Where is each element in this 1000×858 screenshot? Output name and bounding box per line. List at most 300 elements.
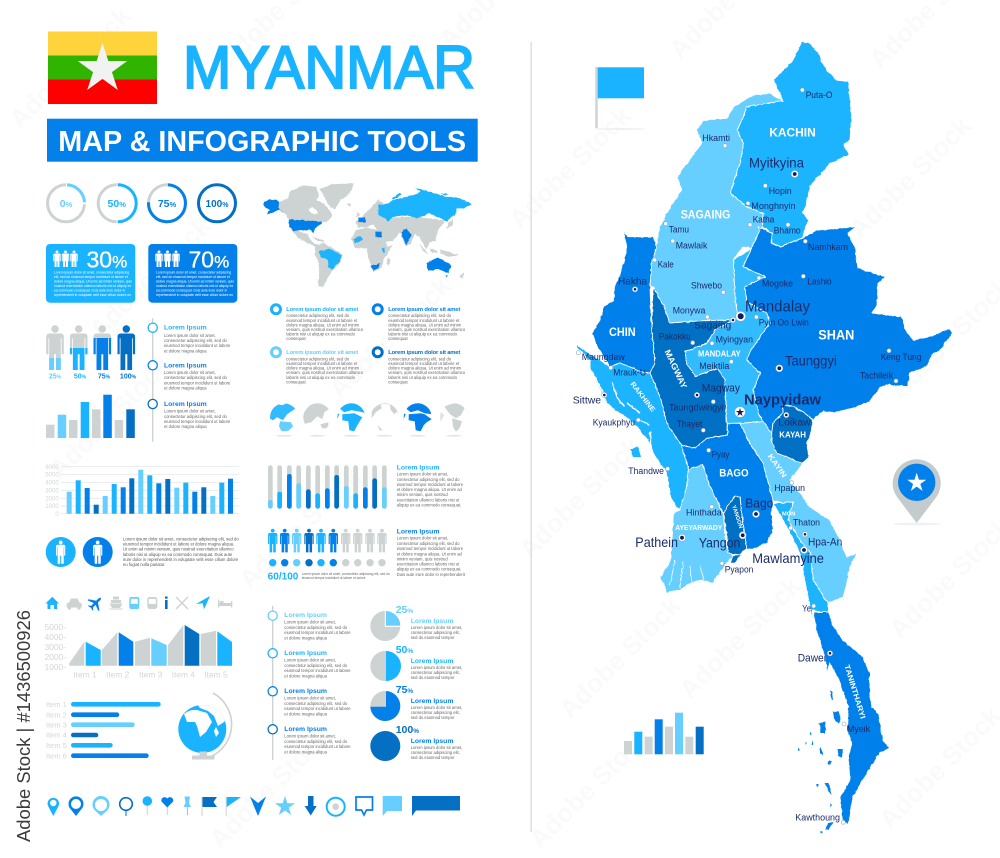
heart pin <box>161 797 173 815</box>
pie 75%: Lorem ipsum dolor sit amet, <box>411 705 462 710</box>
pie 75%: Lorem Ipsum <box>411 698 453 705</box>
legend with four items: consectetur adipiscing elit, sed do <box>286 356 350 361</box>
region: Yangon <box>723 497 747 555</box>
city names: Thaton <box>793 517 820 527</box>
text beside pictogram <box>397 528 466 577</box>
timeline with four entries: eiusmod tempor incididunt ut labore <box>284 668 351 673</box>
timeline with four entries: et dolore magna aliqua <box>284 635 328 640</box>
globe 1 <box>270 404 296 432</box>
icon: blue flag <box>594 67 646 130</box>
pin 3 <box>92 796 109 816</box>
ring 100%: 100% <box>206 199 229 210</box>
city names: Mawlamyine <box>752 550 824 566</box>
people percentage figures: 100% <box>120 374 137 380</box>
region: Mon <box>773 502 828 620</box>
timeline with three entries: Lorem Ipsum <box>164 401 207 408</box>
person icons in circles <box>46 537 113 567</box>
column chart with axis: 5000 <box>45 472 59 478</box>
striped level bars <box>268 465 387 509</box>
region: Magway <box>650 287 733 448</box>
city names: Myitkyina <box>749 155 804 171</box>
globe 5 <box>403 402 433 431</box>
legend with four items: veniam, quis nostrud exercitation ullamco <box>286 370 364 375</box>
small bar chart <box>46 395 135 438</box>
city names: Hkamti <box>702 133 730 143</box>
timeline with four entries: consectetur adipiscing elit, sed do <box>284 625 348 630</box>
legend with four items: consequat <box>286 379 306 384</box>
timeline with three entries: Lorem Ipsum <box>164 362 207 370</box>
stat card 70%: Lorem ipsum dolor sit amet, consectetur adipiscing <box>156 270 231 274</box>
push pin <box>184 796 191 815</box>
city names: Kawthoung <box>795 813 840 823</box>
city names: Namhkam <box>808 242 848 252</box>
stat card 70%: elit, sed do eiusmod tempor incididunt ut labore et <box>156 275 230 279</box>
region names: SAGAING <box>681 210 730 222</box>
column chart with axis: 3000 <box>45 488 59 494</box>
city names: Dawei <box>798 653 826 665</box>
Rakhine inlets <box>590 368 652 450</box>
city names: Pyapon <box>725 565 753 575</box>
paragraph: eu fugiat nulla pariatur. <box>123 562 165 567</box>
timeline with four entries: Lorem Ipsum <box>284 688 327 695</box>
area column chart: Item 1 <box>73 670 97 680</box>
speech box filled <box>383 796 402 816</box>
city names: Thandwe <box>628 466 664 476</box>
column chart with axis: 2000 <box>45 496 59 502</box>
globe 3 <box>337 403 364 431</box>
pie 100%: Lorem ipsum dolor sit amet, <box>411 745 462 750</box>
icon: desk globe <box>178 693 232 760</box>
map pin and marker icons row <box>47 796 460 816</box>
city names: Bhamo <box>774 226 801 236</box>
city names: Hakha <box>618 275 647 287</box>
pie 25%: 25% <box>396 604 413 616</box>
timeline with three entries: Lorem ipsum dolor sit amet, <box>164 409 216 414</box>
city names: Hpapun <box>774 483 805 493</box>
pie 75%: consectetur adipiscing elit, <box>411 710 460 715</box>
legend with four items <box>272 305 466 384</box>
text beside level bars: aliquip ex ea commodo consequat. <box>397 502 461 507</box>
Mergui archipelago islands <box>798 690 843 834</box>
people percentage figures: 50% <box>74 374 87 380</box>
city names: Monghnyin <box>751 201 796 211</box>
column chart with axis: 4000 <box>45 480 59 486</box>
region names: MANDALAY <box>698 350 741 359</box>
legend with four items: laboris nisi ut aliquip ex ea commodo <box>286 375 356 380</box>
60 of 100 people pictogram: Lorem ipsum dolor sit amet, consectetur adipiscing elit, sed do <box>302 572 390 576</box>
region: Rakhine <box>577 344 688 510</box>
timeline with four entries: et dolore magna aliqua <box>284 673 328 678</box>
icon: house <box>46 597 59 609</box>
region names: KAYAH <box>779 430 806 439</box>
map cities and labels <box>573 88 921 824</box>
globe 6 <box>440 403 464 432</box>
timeline with four entries: Lorem ipsum dolor sit amet, <box>284 658 336 662</box>
legend with four items: consequat <box>388 379 408 384</box>
timeline with four entries: Lorem ipsum dolor sit amet, <box>284 620 336 624</box>
city names: Yangon <box>699 534 740 550</box>
region names: KACHIN <box>769 126 816 140</box>
city names: Shwebo <box>691 281 722 291</box>
progress rings <box>48 182 236 224</box>
legend with four items: dolore magna aliqua. Ut enim ad minim <box>286 366 360 371</box>
icon: plane <box>85 592 106 614</box>
icon: info <box>165 596 168 609</box>
text beside level bars: et dolore magna aliqua. Ut enim ad <box>397 487 463 492</box>
city names: Tachileik <box>860 371 893 381</box>
subtitle banner: MAP & INFOGRAPHIC TOOLS <box>58 126 466 158</box>
city names: Magway <box>702 383 740 395</box>
city names: Keng Tung <box>881 352 921 362</box>
legend with four items: dolore magna aliqua. Ut enim ad minim <box>388 366 462 371</box>
stat card 70%: reprehenderit in voluptate velit esse cillum dolore eu <box>156 293 233 297</box>
pie 50%: Lorem Ipsum <box>411 658 453 665</box>
city names: Loikaw <box>778 418 811 429</box>
city names: Pyin Oo Lwin <box>759 318 809 328</box>
paragraph: Lorem ipsum dolor sit amet, consectetur adipiscing elit, sed do <box>123 536 239 541</box>
legend with four items: laboris nisi ut aliquip ex ea commodo <box>286 332 356 337</box>
city names: Naypyidaw <box>744 391 821 408</box>
stat card 70%: nostrud exercitation ullamco laboris nisi ut aliquip ex <box>156 284 233 288</box>
pie 75%: 75% <box>396 684 413 696</box>
stat card 30%: ea commodo consequat. Duis aute irure dolor in <box>54 288 125 292</box>
delta channels <box>670 560 704 588</box>
region: Shan <box>743 227 953 433</box>
city names: Taunggyi <box>785 353 837 369</box>
60 of 100 people pictogram: 60/100 <box>268 571 299 582</box>
legend with four items: eiusmod tempor incididunt ut labore et <box>286 361 358 366</box>
flag of Myanmar <box>48 32 157 104</box>
horizontal bars: Item 6 <box>46 751 67 760</box>
speech banner <box>412 796 460 816</box>
people percentage figures <box>46 325 137 380</box>
pie 75% <box>370 684 462 721</box>
timeline with three entries: Lorem Ipsum <box>164 324 207 332</box>
icon: train <box>147 597 157 609</box>
timeline with three entries: consectetur adipiscing elit, sed do <box>164 414 228 419</box>
timeline with four entries: Lorem ipsum dolor sit amet, <box>284 696 336 700</box>
stat card 30%: Lorem ipsum dolor sit amet, consectetur adipiscing <box>54 270 129 274</box>
region names: TANINTHARYI <box>843 664 867 720</box>
text beside level bars <box>397 464 464 507</box>
city names: Bago <box>745 495 773 510</box>
stat card 30%: reprehenderit in voluptate velit esse cillum dolore eu <box>54 293 131 297</box>
pie 100% <box>370 724 462 761</box>
region names: MAGWAY <box>663 348 690 390</box>
ring 50%: 50% <box>108 198 126 210</box>
text beside level bars: exercitation ullamco laboris nisi ut <box>397 497 460 502</box>
city names: Mandalay <box>745 298 810 315</box>
people percentage figures: 75% <box>98 374 111 380</box>
timeline with three entries: eiusmod tempor incididunt ut labore <box>164 343 231 348</box>
legend with four items: veniam, quis nostrud exercitation ullamco <box>388 370 466 375</box>
city names: Thayet <box>677 419 703 429</box>
region: Bago <box>682 423 773 549</box>
text beside pictogram: Duis aute irure dolor in reprehenderit <box>397 572 466 577</box>
text beside level bars: Lorem ipsum dolor sit amet, <box>397 472 448 477</box>
title: MYANMAR <box>183 34 475 101</box>
area column chart: 1000- <box>45 662 66 672</box>
region names: AYEYARWADY <box>675 525 723 532</box>
highlighted countries <box>264 187 472 277</box>
legend with four items: dolore magna aliqua. Ut enim ad minim <box>388 322 462 327</box>
stat card 30%: nostrud exercitation ullamco laboris nisi ut aliquip ex <box>54 284 131 288</box>
timeline with four entries: consectetur adipiscing elit, sed do <box>284 739 348 744</box>
legend with four items: consectetur adipiscing elit, sed do <box>388 356 452 361</box>
legend with four items: veniam, quis nostrud exercitation ullamco <box>286 327 364 332</box>
paragraph: Ut enim ad minim veniam, quis nostrud exercitation ullamco <box>123 547 234 552</box>
city names: Mawlaik <box>676 240 708 250</box>
legend with four items: Lorem ipsum dolor sit amet <box>388 307 460 313</box>
speech box outline <box>356 797 372 815</box>
timeline with four entries: Lorem Ipsum <box>284 612 327 619</box>
world map <box>264 183 472 287</box>
legend with four items: consectetur adipiscing elit, sed do <box>388 313 452 318</box>
star <box>275 796 295 815</box>
paragraph: eiusmod tempor incididunt ut labore et dolore magna aliqua. <box>123 542 234 546</box>
pin 1 <box>47 798 59 816</box>
stat card 70%: 70% <box>188 246 229 272</box>
area column chart: Item 3 <box>139 670 163 680</box>
flag 1 <box>202 797 217 816</box>
text beside pictogram: minim veniam, quis nostrud <box>397 556 448 561</box>
text beside pictogram: consectetur adipiscing elit, sed do <box>397 541 460 546</box>
bar chart under map <box>624 713 704 754</box>
timeline with four entries: consectetur adipiscing elit, sed do <box>284 663 348 668</box>
legend with four items: laboris nisi ut aliquip ex ea commodo <box>388 332 458 337</box>
pie 100%: consectetur adipiscing elit, <box>411 750 460 755</box>
text beside level bars: consectetur adipiscing elit, sed do <box>397 477 460 482</box>
text beside level bars: minim veniam, quis nostrud <box>397 492 448 497</box>
column chart with axis <box>45 465 239 518</box>
pie charts with captions <box>370 604 462 761</box>
legend with four items: Lorem ipsum dolor sit amet <box>286 350 358 356</box>
pie 25%: consectetur adipiscing elit, <box>411 630 460 635</box>
icon: car <box>67 598 82 610</box>
timeline with three entries <box>148 318 231 442</box>
Rakhine coast island <box>630 447 641 457</box>
city names: Katha <box>753 214 774 224</box>
timeline with three entries: Lorem ipsum dolor sit amet, <box>164 333 216 338</box>
legend with four items: eiusmod tempor incididunt ut labore et <box>286 318 358 323</box>
pie 100%: 100% <box>396 724 419 736</box>
pie 100%: sed do eiusmod tempor <box>411 755 455 760</box>
pin 2 <box>68 796 84 816</box>
city names: Myingyan <box>716 334 753 344</box>
timeline with four entries: eiusmod tempor incididunt ut labore <box>284 630 351 635</box>
stock watermark id: Adobe Stock | #1436500926 <box>14 610 34 842</box>
horizontal bars: Item 3 <box>46 720 67 729</box>
timeline with four entries: Lorem Ipsum <box>284 650 327 657</box>
timeline with four entries: eiusmod tempor incididunt ut labore <box>284 744 351 749</box>
timeline with four entries: Lorem Ipsum <box>284 726 327 733</box>
paragraph: irure dolor in reprehenderit in voluptate velit esse cillum dolore <box>123 557 239 562</box>
area column chart: Item 5 <box>204 670 228 680</box>
timeline with three entries: Lorem ipsum dolor sit amet, <box>164 370 216 375</box>
stat card 30%: 30% <box>86 246 127 272</box>
timeline with three entries: eiusmod tempor incididunt ut labore <box>164 419 231 424</box>
target <box>327 798 345 816</box>
ring 100% <box>198 185 236 222</box>
stat card 70% <box>148 244 237 303</box>
legend with four items: Lorem ipsum dolor sit amet <box>388 350 460 356</box>
horizontal bars: Item 4 <box>46 731 67 740</box>
city names: Ye <box>802 604 811 614</box>
area column chart: 4000- <box>45 632 66 642</box>
region: Sagaing <box>650 93 783 323</box>
timeline with four entries: eiusmod tempor incididunt ut labore <box>284 706 351 711</box>
down arrow <box>305 796 317 816</box>
ring 50% <box>98 182 138 224</box>
timeline with four entries: et dolore magna aliqua <box>284 711 328 716</box>
city names: Mogoke <box>762 279 793 289</box>
city names: Hopin <box>769 186 792 196</box>
text beside pictogram: exercitation ullamco laboris nisi ut <box>397 562 460 566</box>
capital star <box>736 408 744 416</box>
timeline with three entries: consectetur adipiscing elit, sed do <box>164 338 228 343</box>
globe shadows <box>276 435 462 437</box>
transport and service icons <box>46 592 232 614</box>
text beside pictogram: Lorem Ipsum <box>397 528 439 535</box>
column chart with axis: 1000 <box>45 504 59 510</box>
icon: cutlery <box>176 597 188 609</box>
ring 75% <box>148 185 186 222</box>
text beside pictogram: eiusmod tempor incididunt ut labore <box>397 546 464 551</box>
icon: ship <box>110 596 122 610</box>
area column chart <box>45 622 232 680</box>
city dots <box>576 88 898 824</box>
timeline with three entries: eiusmod tempor incididunt ut labore <box>164 380 231 385</box>
city names <box>573 90 921 823</box>
city names: Lashio <box>807 277 832 287</box>
region: Kayah <box>772 405 813 463</box>
legend with four items: eiusmod tempor incididunt ut labore et <box>388 318 460 323</box>
paragraph: laboris nisi ut aliquip ex ea commodo consequat. Duis aute <box>123 552 233 557</box>
timeline with four entries: consectetur adipiscing elit, sed do <box>284 701 348 706</box>
icon: navigation arrow <box>196 596 210 609</box>
city names: Tamu <box>669 225 689 235</box>
people percentage figures: 25% <box>49 374 62 380</box>
city names: Monywa <box>673 305 705 315</box>
60 of 100 people pictogram <box>268 529 390 582</box>
region: Ayeyarwady <box>660 465 733 593</box>
city names: Sagaing <box>694 319 731 331</box>
timeline with four entries <box>268 606 351 760</box>
stat card 70%: ea commodo consequat. Duis aute irure dolor in <box>156 288 227 292</box>
column chart with axis: 6000 <box>45 465 59 471</box>
icon: location pin with star <box>893 459 941 525</box>
stat card 30% <box>46 244 135 303</box>
pie 25%: Lorem Ipsum <box>411 618 453 625</box>
text beside level bars: Lorem Ipsum <box>397 464 439 471</box>
stat card 70%: dolore magna aliqua. Ut enim ad minim veniam, quis <box>156 280 234 284</box>
text beside pictogram: et dolore magna aliqua. Ut enim ad <box>397 551 463 556</box>
ring 75%: 75% <box>158 198 177 210</box>
region names: BAGO <box>719 468 749 480</box>
city names: Hinthada <box>686 508 722 518</box>
region names: RAKHINE <box>628 381 656 414</box>
city names: Pyay <box>712 449 730 459</box>
area column chart: Item 2 <box>106 670 130 680</box>
city names: Maungdaw <box>582 352 625 362</box>
region names: YANGON <box>730 505 743 529</box>
pin 4 <box>120 798 132 816</box>
horizontal bars: Item 5 <box>46 741 67 750</box>
legend with four items: consequat <box>388 336 408 341</box>
city names: Pakokku <box>659 331 691 341</box>
pie 50% <box>370 644 462 681</box>
legend with four items: consequat <box>286 336 306 341</box>
text beside pictogram: aliquip ex ea commodo consequat. <box>397 567 461 572</box>
round pin <box>142 796 152 815</box>
timeline with three entries: et dolore magna aliqua <box>164 424 207 429</box>
horizontal bars <box>46 700 161 760</box>
city names: Myeik <box>847 724 870 734</box>
timeline with three entries: consectetur adipiscing elit, sed do <box>164 375 228 380</box>
horizontal bars: Item 2 <box>46 710 67 719</box>
city names: Kyaukphyu <box>593 418 635 428</box>
map regions <box>577 42 953 834</box>
vertical divider <box>531 42 532 832</box>
region names: MON <box>782 512 795 518</box>
pie 50%: Lorem ipsum dolor sit amet, <box>411 665 462 670</box>
pie 50%: 50% <box>396 644 413 656</box>
legend with four items: veniam, quis nostrud exercitation ullamco <box>388 327 466 332</box>
chevron marker <box>250 796 266 816</box>
city names: Meiktila <box>699 361 729 371</box>
ring 0%: 0% <box>60 198 73 210</box>
legend with four items: eiusmod tempor incididunt ut labore et <box>388 361 460 366</box>
main city centers <box>603 172 831 655</box>
timeline with three entries: et dolore magna aliqua <box>164 348 207 353</box>
Myanmar map <box>573 42 953 834</box>
region: Tanintharyi <box>813 612 890 825</box>
pie 100%: Lorem Ipsum <box>411 738 453 745</box>
legend with four items: dolore magna aliqua. Ut enim ad minim <box>286 322 360 327</box>
region names: CHIN <box>609 327 636 339</box>
city names: Kale <box>658 260 674 270</box>
icon: bus <box>129 597 139 609</box>
city names: Taungdwingyi <box>669 403 724 413</box>
flag 2 <box>226 797 241 816</box>
horizontal bars: Item 1 <box>46 700 67 709</box>
city names: Mrauk-U <box>613 368 646 378</box>
globe 2 <box>302 402 330 428</box>
region names: SHAN <box>818 327 854 342</box>
globe 4 <box>371 403 398 430</box>
pie 50%: consectetur adipiscing elit, <box>411 670 460 675</box>
pie 25%: sed do eiusmod tempor <box>411 635 455 640</box>
stat card 30%: dolore magna aliqua. Ut enim ad minim veniam, quis <box>54 280 132 284</box>
pie 75%: sed do eiusmod tempor <box>411 715 455 720</box>
timeline with three entries: et dolore magna aliqua <box>164 386 207 391</box>
legend with four items: laboris nisi ut aliquip ex ea commodo <box>388 375 458 380</box>
region: Mandalay <box>685 248 770 423</box>
60 of 100 people pictogram: eiusmod tempor incididunt ut labore et dolore <box>302 576 366 580</box>
region names <box>609 126 867 720</box>
pie 25% <box>370 604 462 641</box>
icon: bed <box>218 600 232 608</box>
legend with four items: Lorem ipsum dolor sit amet <box>286 307 358 313</box>
pie 25%: Lorem ipsum dolor sit amet, <box>411 625 462 630</box>
region: Chin <box>592 230 657 375</box>
area column chart: 2000- <box>45 652 66 662</box>
column chart with axis: 0 <box>55 512 59 518</box>
legend with four items: consectetur adipiscing elit, sed do <box>286 313 350 318</box>
city names: Puta-O <box>806 90 832 100</box>
city names: Sittwe <box>573 394 601 406</box>
text beside level bars: eiusmod tempor incididunt ut labore <box>397 482 464 487</box>
